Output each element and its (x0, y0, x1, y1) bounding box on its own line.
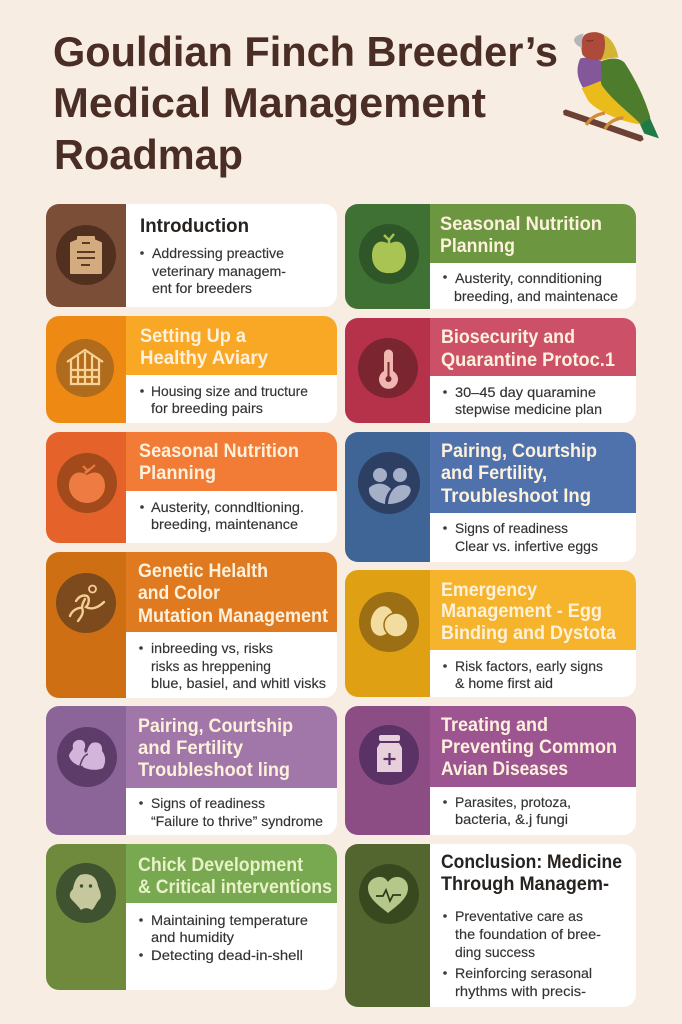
heading: Avian Diseases (441, 759, 568, 780)
heading: & Critical interventions (138, 877, 332, 898)
text block: the foundation of bree- (455, 926, 601, 942)
icon: aviary (56, 339, 114, 397)
heading: and Color (138, 583, 221, 604)
heading: Emergency (441, 580, 537, 601)
text block: stepwise medicine plan (455, 401, 602, 417)
heading: Setting Up a (140, 326, 246, 347)
text block: veterinary managem- (152, 263, 286, 279)
text block: Clear vs. infertive eggs (455, 538, 598, 554)
text block: & home first aid (455, 675, 553, 691)
text block: rhythms with precis- (455, 983, 586, 999)
text block: and humidity (151, 929, 234, 945)
heading: Troubleshoot ling (138, 760, 290, 781)
text block (443, 270, 618, 304)
heading (441, 852, 622, 895)
text block: Reinforcing serasonal (455, 965, 592, 981)
title: Roadmap (54, 131, 243, 178)
text block: risks as hreppening (151, 658, 271, 674)
text block (140, 499, 304, 532)
icon: apple (57, 453, 117, 513)
text block (443, 658, 603, 691)
text block (139, 640, 326, 691)
title: Medical Management (53, 79, 486, 126)
icon: running figure (56, 573, 116, 633)
heading: Mutation Management (138, 606, 329, 627)
heading: Treating and (441, 715, 548, 736)
heading: Healthy Aviary (140, 348, 268, 369)
text block (443, 520, 598, 554)
panel: Introduction (46, 204, 337, 307)
panel: Setting Up a Healthy Aviary (46, 316, 337, 423)
panel: Treating and Preventing Common Avian Diseases (345, 706, 636, 835)
text block: Detecting dead-in-shell (151, 947, 303, 963)
heading: and Fertility, (441, 463, 547, 484)
text block: Risk factors, early signs (455, 658, 603, 674)
icon: eggs (359, 592, 419, 652)
text block (139, 912, 308, 963)
heading (138, 855, 332, 898)
text block: breeding, and maintenace (454, 288, 618, 304)
heading (440, 214, 602, 257)
text block (443, 384, 602, 417)
heading: Quarantine Protoc.1 (441, 350, 615, 371)
text block: Signs of readiness (455, 520, 568, 536)
heading: Management - Egg (441, 601, 602, 622)
heading: Through Managem- (441, 874, 609, 895)
text block (140, 245, 286, 296)
text block: “Failure to thrive” syndrome (151, 813, 323, 829)
text block: bacteria, &.j fungi (455, 811, 568, 827)
text block: Housing size and tructure (151, 383, 308, 399)
text block: Addressing preactive (152, 245, 284, 261)
text block: Austerity, connditioning (455, 270, 602, 286)
heading: Seasonal Nutrition (139, 441, 299, 462)
heading (138, 716, 293, 781)
heading: Genetic Helalth (138, 561, 268, 582)
text block: ent for breeders (152, 280, 252, 296)
panel: Conclusion (345, 844, 636, 1007)
text block (443, 908, 601, 999)
heading (139, 441, 299, 484)
icon: chick (56, 863, 116, 923)
heading: and Fertility (138, 738, 243, 759)
icon: thermometer (358, 338, 418, 398)
heading: Seasonal Nutrition (440, 214, 602, 235)
text block: Maintaining temperature (151, 912, 308, 928)
text block: Signs of readiness (151, 795, 265, 811)
icon: clipboard (56, 225, 116, 285)
heading: Chick Development (138, 855, 304, 876)
text block: Austerity, conndltioning. (151, 499, 304, 515)
text block (443, 794, 571, 827)
heading: Planning (139, 463, 216, 484)
text block: Parasites, protoza, (455, 794, 571, 810)
text block: 30–45 day quaramine (455, 384, 596, 400)
text block: for breeding pairs (151, 400, 263, 416)
heading (138, 561, 329, 627)
heading: Troubleshoot Ing (441, 486, 591, 507)
icon: heart with pulse (359, 864, 419, 924)
heading: Pairing, Courtship (441, 441, 597, 462)
heading (441, 327, 615, 371)
heading: Binding and Dystota (441, 623, 616, 644)
panel: Pairing, Courtship and Fertility Troubleshooting (blue) (345, 432, 636, 562)
panel: Seasonal Nutrition Planning (green) (345, 204, 636, 309)
title (53, 28, 558, 178)
heading (441, 715, 617, 780)
text block: ding success (455, 944, 535, 960)
text block (139, 795, 323, 829)
text block: inbreeding vs, risks (151, 640, 273, 656)
text block: Preventative care as (455, 908, 583, 924)
panel: Emergency Management (345, 570, 636, 697)
icon: Gouldian finch on perch (563, 32, 659, 142)
panel: Pairing, Courtship and Fertility Troubleshooting (purple) (46, 706, 337, 835)
heading (140, 326, 268, 369)
icon: two people (358, 452, 420, 514)
text block: blue, basiel, and whitl visks (151, 675, 326, 691)
icon: pair of birds (57, 727, 117, 787)
heading: Conclusion: Medicine (441, 852, 622, 873)
heading: Planning (440, 236, 515, 257)
panel: Biosecurity and Quarantine Protocol (345, 318, 636, 423)
icon: medicine bottle (359, 725, 419, 785)
heading: Introduction (140, 216, 249, 237)
heading: Preventing Common (441, 737, 617, 758)
heading (441, 580, 616, 644)
title: Gouldian Finch Breeder’s (53, 28, 558, 75)
panel: Chick Development and Critical interventions (46, 844, 337, 990)
panel: Genetic Health and Color Mutation Management (46, 552, 337, 698)
icon: green apple (359, 224, 419, 284)
text block: breeding, maintenance (151, 516, 298, 532)
text block (140, 383, 308, 416)
panel: Seasonal Nutrition Planning (orange) (46, 432, 337, 543)
heading (441, 441, 597, 507)
heading: Biosecurity and (441, 327, 575, 348)
heading: Pairing, Courtship (138, 716, 293, 737)
